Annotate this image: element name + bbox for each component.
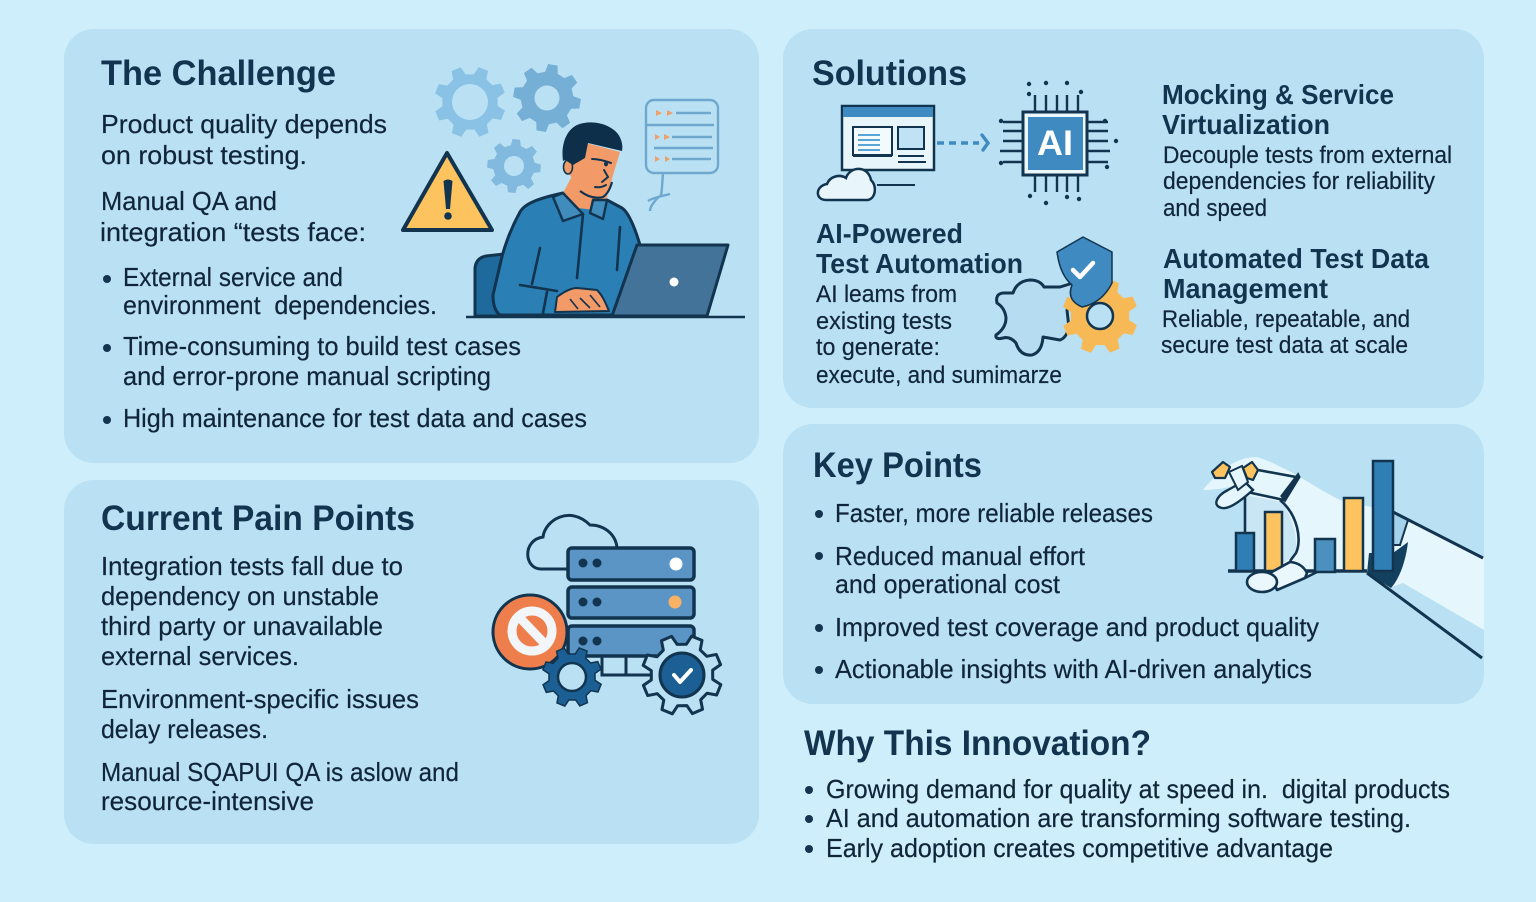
heading: Current Pain Points: Current Pain Points bbox=[101, 499, 415, 538]
text block: Automated Test Data Management bbox=[1161, 243, 1430, 359]
text block: pain points: third party or unavailable bbox=[101, 611, 383, 641]
bullet list: challenges bbox=[103, 262, 587, 433]
text block: Mocking & Service Virtualization: Decouple tests from external bbox=[1163, 142, 1452, 169]
text block: pain points bbox=[101, 551, 459, 816]
bullet list: challenges: environment dependencies. bbox=[123, 290, 437, 320]
text block: intro: Product quality depends bbox=[101, 109, 387, 139]
icon: dark gear bbox=[533, 638, 611, 716]
panel: Solutions bbox=[783, 29, 1484, 408]
panel: Key Points bbox=[783, 424, 1484, 704]
text block: intro: Manual QA and bbox=[101, 186, 277, 216]
icon: AI chip: AI bbox=[1037, 124, 1073, 163]
text block: Mocking & Service Virtualization: Mocking & Service bbox=[1162, 79, 1394, 110]
text block: AI-Powered Test Automation bbox=[816, 218, 1062, 389]
bullet list: challenges: Time-consuming to build test cases bbox=[123, 331, 521, 361]
icon: warning triangle bbox=[403, 153, 492, 230]
text block: pain points: external services. bbox=[101, 641, 299, 671]
text block: AI-Powered Test Automation: execute, and sumimarze bbox=[816, 362, 1062, 389]
bar chart bbox=[1236, 461, 1393, 572]
text block: pain points: Integration tests fall due to bbox=[101, 551, 403, 581]
arrow: window to AI chip bbox=[937, 135, 988, 150]
bullet list: reasons bbox=[805, 774, 1450, 863]
icon: AI chip bbox=[999, 81, 1118, 205]
icon: puzzle, gear and shield bbox=[996, 237, 1149, 365]
bullet list: reasons: AI and automation are transforming software testing. bbox=[826, 803, 1411, 833]
icon: cloud outline bbox=[528, 515, 617, 569]
panel: The Challenge bbox=[64, 29, 759, 463]
bullet list: key points: Actionable insights with AI-driven analytics bbox=[835, 654, 1312, 684]
text block: Mocking & Service Virtualization: and speed bbox=[1163, 195, 1267, 222]
bullet list: key points: Reduced manual effort bbox=[835, 541, 1086, 571]
text block: intro: integration “tests face: bbox=[100, 217, 366, 247]
text block: AI-Powered Test Automation: AI-Powered bbox=[816, 218, 963, 249]
bullet list: reasons: Early adoption creates competitive advantage bbox=[826, 833, 1333, 863]
text block: Automated Test Data Management: Automated Test Data bbox=[1163, 243, 1430, 274]
bullet list: challenges: External service and bbox=[123, 262, 343, 292]
text block: pain points: Manual SQAPUI QA is aslow and bbox=[101, 757, 459, 787]
bullet list: challenges: High maintenance for test data and cases bbox=[123, 403, 587, 433]
text block: AI-Powered Test Automation: AI leams from bbox=[816, 281, 957, 308]
text block: Automated Test Data Management: Management bbox=[1163, 273, 1328, 304]
text block: Mocking & Service Virtualization: dependencies for reliability bbox=[1163, 168, 1435, 195]
text block: AI-Powered Test Automation: existing tests bbox=[816, 308, 952, 335]
heading: Why This Innovation?: Why This Innovation? bbox=[804, 724, 1151, 763]
bullet list: challenges: and error-prone manual scripting bbox=[123, 361, 491, 391]
icon: three gears bbox=[424, 56, 586, 195]
text block: AI-Powered Test Automation: to generate: bbox=[816, 334, 940, 361]
heading: The Challenge: The Challenge bbox=[101, 54, 336, 93]
text block: intro: on robust testing. bbox=[101, 140, 307, 170]
icon: check gear bbox=[630, 623, 734, 727]
text block: Mocking & Service Virtualization bbox=[1162, 79, 1452, 222]
icon: test list card bbox=[646, 100, 718, 211]
icon: app window with cloud bbox=[818, 106, 934, 200]
icon: cloud server with gears bbox=[493, 515, 734, 727]
bullet list: key points: Improved test coverage and product quality bbox=[835, 612, 1319, 642]
text block: pain points: dependency on unstable bbox=[101, 581, 379, 611]
icon: blocked sign bbox=[493, 595, 567, 669]
text block: Automated Test Data Management: secure test data at scale bbox=[1161, 332, 1408, 359]
text block: pain points: Environment-specific issues bbox=[101, 684, 419, 714]
heading: Solutions: Solutions bbox=[812, 54, 967, 93]
text block: Automated Test Data Management: Reliable, repeatable, and bbox=[1162, 306, 1410, 333]
text block: AI-Powered Test Automation: Test Automation bbox=[816, 248, 1023, 279]
text block: pain points: resource-intensive bbox=[101, 786, 314, 816]
bullet list: key points bbox=[815, 498, 1319, 684]
bullet list: key points: and operational cost bbox=[835, 569, 1061, 599]
arm silhouette bbox=[1203, 457, 1484, 630]
text block: intro bbox=[100, 109, 387, 247]
bullet list: reasons: Growing demand for quality at speed in. digital products bbox=[826, 774, 1450, 804]
text block: Mocking & Service Virtualization: Virtualization bbox=[1162, 109, 1330, 140]
text block: pain points: delay releases. bbox=[101, 714, 268, 744]
bullet list: key points: Faster, more reliable releases bbox=[835, 498, 1153, 528]
icon: server stack bbox=[568, 548, 694, 675]
illustration: person at laptop bbox=[466, 122, 745, 317]
panel: Current Pain Points bbox=[64, 480, 759, 844]
illustration: robot hand with bar chart bbox=[1203, 457, 1484, 658]
heading: Key Points: Key Points bbox=[813, 446, 982, 485]
section: Why This Innovation? bbox=[804, 724, 1450, 863]
